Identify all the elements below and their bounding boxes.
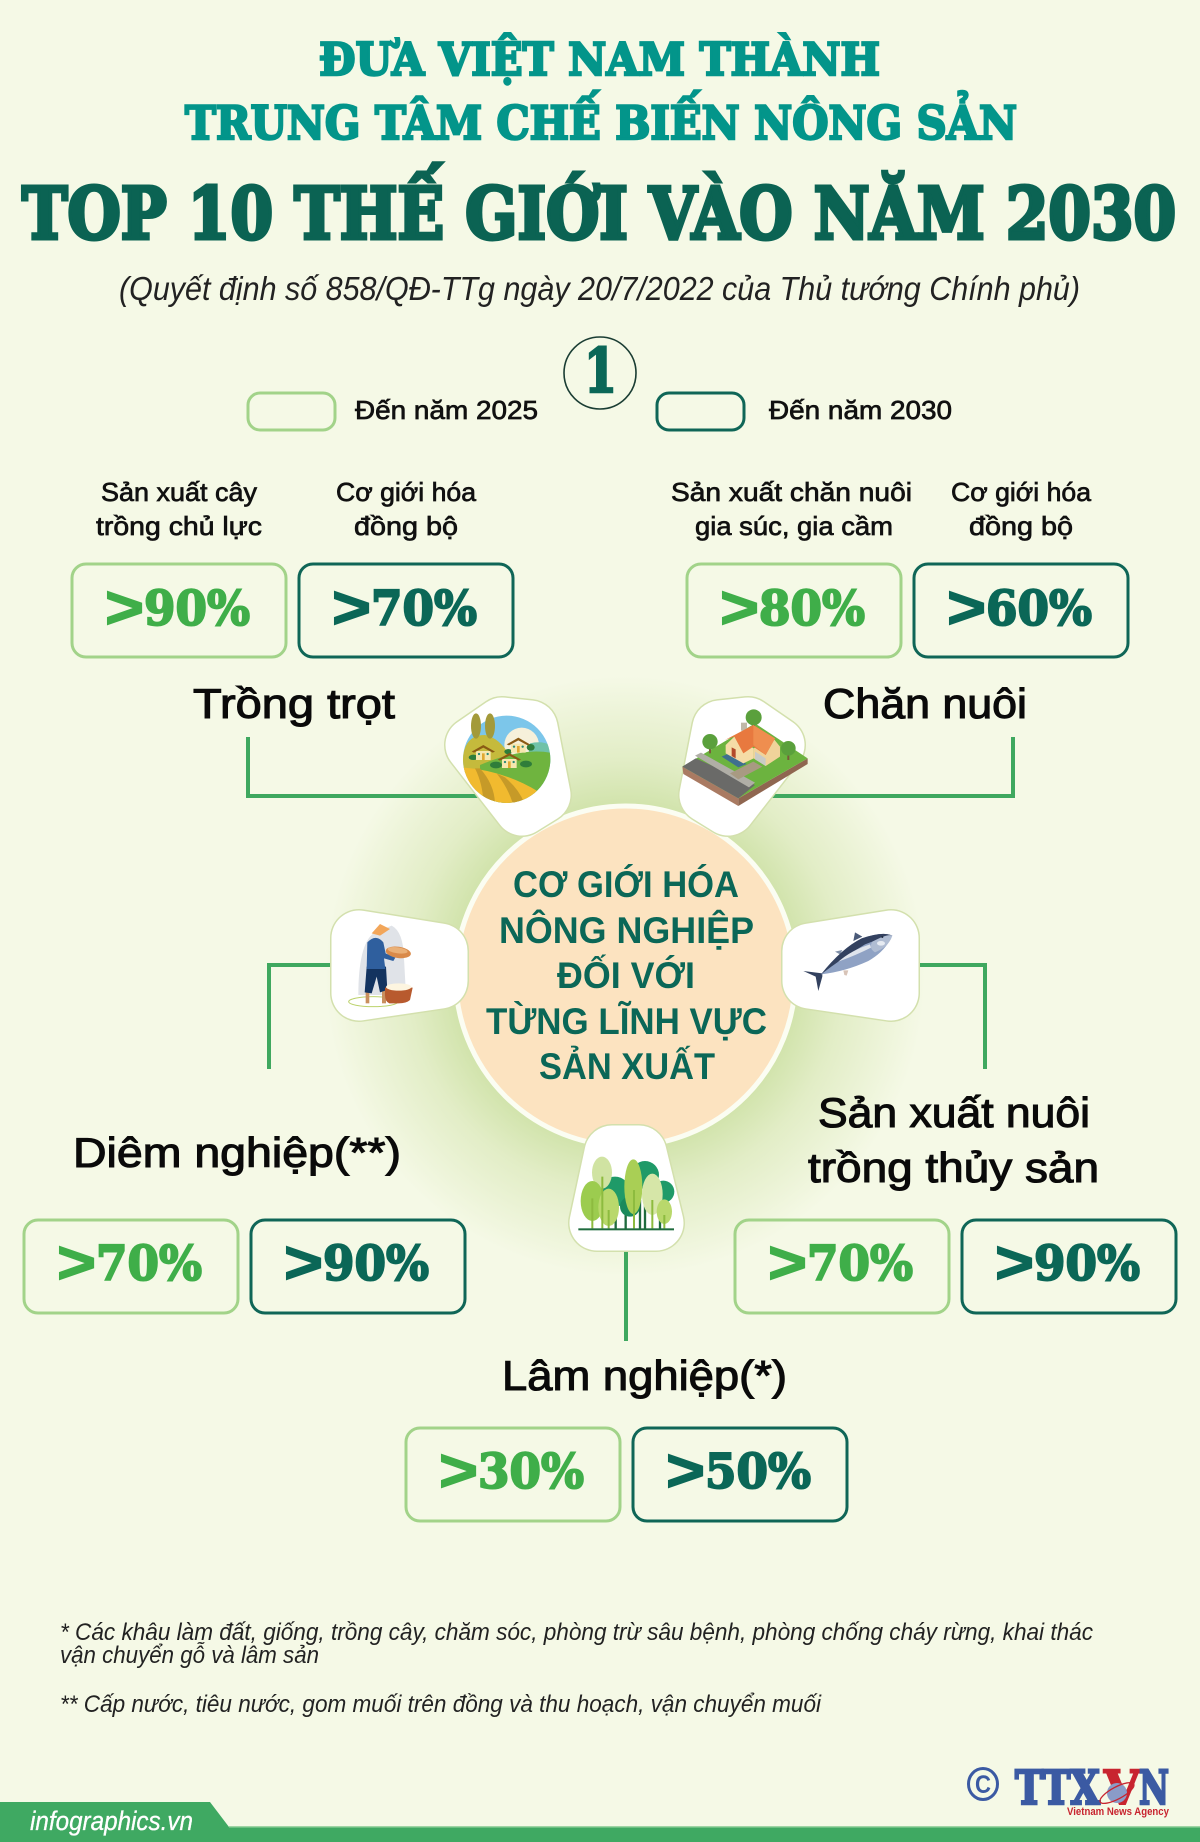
label: sản xuất chăn nuôi gia súc, gia cầm [671,477,912,541]
icon: forest [578,1153,674,1230]
subtitle: (Quyết định số 858/QĐ-TTg ngày 20/7/2022 của Thủ tướng Chính phủ) [119,270,1080,307]
value box: >70%: 70% [96,1236,202,1292]
label: cơ giới hóa đồng bộ [336,477,477,541]
label: cơ giới hóa đồng bộ: đồng bộ [354,511,458,541]
logo: TTXVN: V [1103,1761,1142,1816]
central circle: CƠ GIỚI HÓA [513,863,739,905]
connector: trồng trọt [248,737,490,796]
value box: >50%: 50% [705,1444,811,1500]
value box: >90%: > [105,574,144,641]
label: sản xuất chăn nuôi gia súc, gia cầm: Sản xuất chăn nuôi [671,477,912,507]
title [22,32,1176,256]
number badge [564,336,636,409]
footnotes: vận chuyển gỗ và lâm sản [60,1641,319,1669]
heading: thủy sản: trồng thủy sản [808,1144,1099,1191]
value box: >60%: > [947,574,986,641]
connector: diêm nghiệp [269,965,345,1069]
heading: thủy sản [808,1089,1099,1191]
label: sản xuất chăn nuôi gia súc, gia cầm: gia súc, gia cầm [695,511,893,541]
label: sản xuất cây trồng chủ lực: trồng chủ lực [96,511,262,541]
value box: >90% [962,1220,1176,1313]
panel: diêm nghiệp [24,1129,465,1313]
panel: lâm nghiệp [406,1352,847,1521]
icon: tuna fish [803,932,892,993]
value box: >60% [914,564,1128,657]
heading: diêm nghiệp: Diêm nghiệp(**) [73,1129,401,1176]
footnotes: ** Cấp nước, tiêu nước, gom muối trên đồng và thu hoạch, vận chuyển muối [60,1691,822,1718]
connector: lâm nghiệp [624,1240,628,1341]
value box: >80%: 80% [759,581,865,637]
label: sản xuất cây trồng chủ lực [96,477,262,541]
value box: >90%: 90% [144,581,250,637]
value box: >90%: 90% [1034,1236,1140,1292]
value box: >80% [687,564,901,657]
connector: chăn nuôi [760,737,1013,796]
value box: >90%: > [284,1229,323,1296]
heading: thủy sản: Sản xuất nuôi [818,1089,1090,1136]
heading: chăn nuôi: Chăn nuôi [823,680,1027,727]
panel: chăn nuôi [671,477,1128,727]
value box: >70% [299,564,513,657]
footer bar: infographics.vn [30,1806,193,1836]
footer bar [0,1802,1200,1842]
footnotes: * Các khâu làm đất, giống, trồng cây, chăm sóc, phòng trừ sâu bệnh, phòng chống cháy rừng, khai thác [60,1619,1093,1646]
icon: salt worker [349,924,440,1007]
panel: sản xuất nuôi trồng thủy sản [735,1089,1176,1313]
value box: >30% [406,1428,620,1521]
central circle: TỪNG LĨNH VỰC [486,1000,767,1042]
legend: 2030 [657,393,952,430]
label: cơ giới hóa đồng bộ: Cơ giới hóa [951,477,1092,507]
logo: TTXVN: Vietnam News Agency [1067,1806,1170,1818]
label: cơ giới hóa đồng bộ: Cơ giới hóa [336,477,477,507]
central circle [456,806,796,1146]
icon: farm house [682,709,808,808]
value box: >90% [251,1220,465,1313]
label: cơ giới hóa đồng bộ: đồng bộ [969,511,1073,541]
title: TRUNG TÂM CHẾ BIẾN NÔNG SẢN [185,89,1017,150]
value box: >60%: 60% [986,581,1092,637]
value box: >90%: > [995,1229,1034,1296]
connector: thủy sản [905,965,985,1069]
legend: 2025 [248,393,538,430]
footnotes [60,1619,1093,1718]
value box: >70%: > [768,1229,807,1296]
value box: >70% [24,1220,238,1313]
legend: 2030: Đến năm 2030 [769,395,952,425]
value box: >80%: > [720,574,759,641]
title: ĐƯA VIỆT NAM THÀNH [319,32,880,86]
value box: >70%: 70% [807,1236,913,1292]
value box: >70%: > [332,574,371,641]
central circle: ĐỐI VỚI [557,954,695,996]
value box: >70%: 70% [371,581,477,637]
value box: >50%: > [666,1437,705,1504]
logo: TTXVN: TTX [1015,1761,1100,1816]
logo: TTXVN: C [975,1771,991,1799]
central circle: NÔNG NGHIỆP [499,909,754,951]
value box: >30%: 30% [478,1444,584,1500]
heading: trồng trọt: Trồng trọt [193,680,395,727]
logo: TTXVN [968,1761,1170,1818]
value box: >70% [735,1220,949,1313]
value box: >50% [633,1428,847,1521]
value box: >90% [72,564,286,657]
label: sản xuất cây trồng chủ lực: Sản xuất cây [101,477,257,507]
central circle: SẢN XUẤT [539,1046,715,1087]
value box: >70%: > [57,1229,96,1296]
logo: TTXVN: N [1139,1761,1169,1816]
value box: >30%: > [439,1437,478,1504]
panel: trồng trọt [72,477,513,727]
label: cơ giới hóa đồng bộ [951,477,1092,541]
heading: lâm nghiệp: Lâm nghiệp(*) [502,1352,787,1399]
legend: 2025: Đến năm 2025 [355,395,538,425]
number badge: 1 [584,336,617,407]
value box: >90%: 90% [323,1236,429,1292]
icon: farm landscape [460,713,553,808]
